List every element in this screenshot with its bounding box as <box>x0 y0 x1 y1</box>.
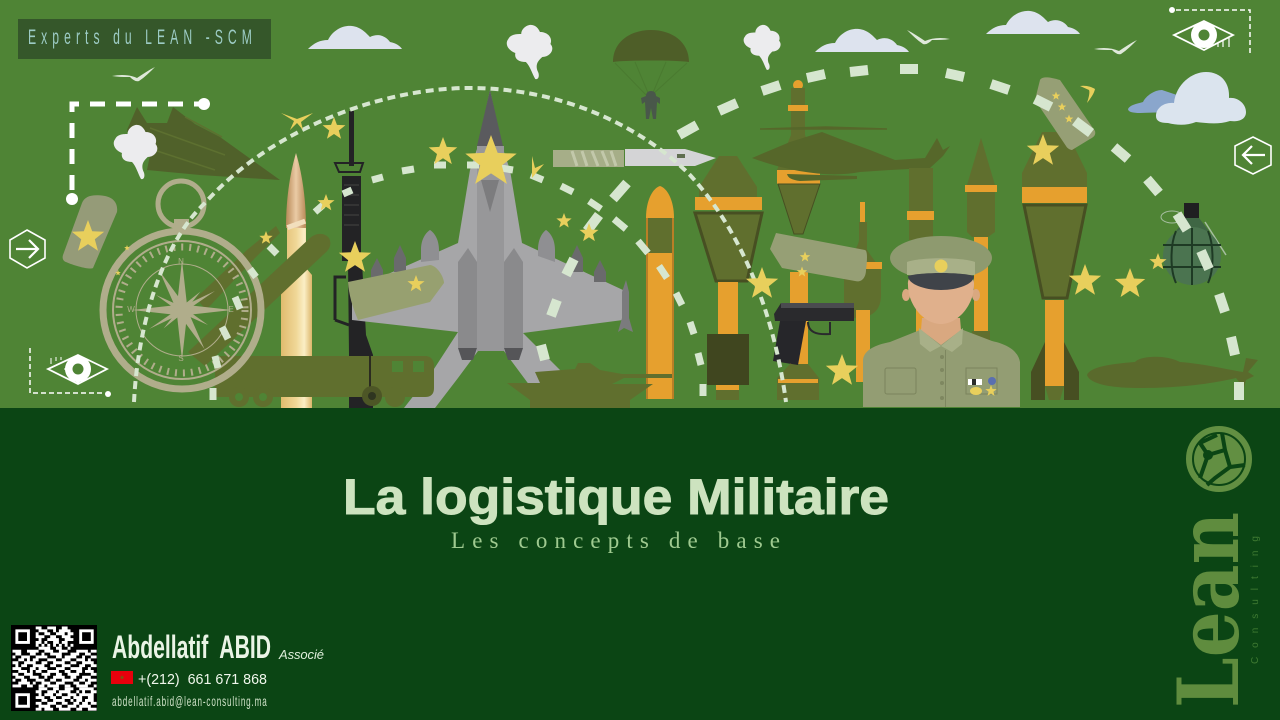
logo wordmark: Lean <box>1159 512 1258 708</box>
subtitle: Les concepts de base <box>451 528 780 553</box>
submarine silhouette <box>1087 357 1258 388</box>
parachutist <box>613 30 689 119</box>
icon: Morocco flag <box>111 671 133 684</box>
knife <box>553 149 716 167</box>
missile 7 large <box>1022 132 1087 400</box>
logo globe <box>1189 429 1249 489</box>
smoke puffs <box>114 25 781 179</box>
missile 6 slim <box>965 138 997 340</box>
green jet silhouette <box>127 107 280 180</box>
missile 3 with helicopter <box>777 80 820 400</box>
thin dashed arc <box>134 88 786 402</box>
compass: E <box>228 305 234 314</box>
shoulder patch: wing <box>348 265 444 320</box>
shoulder patch: top right <box>1035 77 1095 150</box>
wide dashed arc: outer <box>541 69 1239 400</box>
wide dashed arc: inner <box>213 165 703 400</box>
hexagon arrow: left <box>1235 137 1271 174</box>
background: top green band <box>0 0 1280 408</box>
banner: Experts du LEAN -SCM: Experts du LEAN -SCM <box>28 24 252 49</box>
banner: Experts du LEAN -SCM <box>18 19 271 59</box>
hexagon arrow: right <box>10 230 45 268</box>
rifle <box>335 111 373 408</box>
eye icon: bottom left <box>30 348 111 397</box>
fighter jet <box>352 90 633 408</box>
logo: Lean Consulting <box>1159 429 1261 708</box>
missile 4 bottle <box>844 202 882 382</box>
shoulder patch: left <box>63 195 117 269</box>
QR code <box>11 625 97 711</box>
clouds <box>308 11 1080 52</box>
contact name: Abdellatif ABID <box>112 629 271 665</box>
tank silhouette <box>507 363 672 408</box>
helicopter silhouette <box>752 127 950 181</box>
contact phone: +(212) 661 671 868 <box>138 672 267 688</box>
logo tagline: Consulting <box>1250 536 1261 664</box>
compass: W <box>127 305 135 314</box>
compass: S <box>178 354 184 363</box>
contact email: abdellatif.abid@lean-consulting.ma <box>112 695 267 710</box>
grenade <box>1161 203 1226 285</box>
eye icon: top right <box>1169 7 1250 56</box>
cloud group: right blue and white clouds <box>1128 72 1246 125</box>
officer <box>863 236 1020 407</box>
pistol <box>773 303 854 365</box>
title: La logistique Militaire <box>343 469 889 525</box>
contact role: Associé <box>278 647 324 662</box>
military truck <box>215 356 434 407</box>
background: bottom dark green band <box>0 408 1280 720</box>
artillery barrels <box>188 226 330 366</box>
shoulder patch: center right <box>770 233 867 281</box>
compass <box>103 181 261 389</box>
missile 5 column <box>907 168 934 340</box>
top-left dashed corner <box>66 98 210 205</box>
missile 2: mortar <box>695 156 762 400</box>
compass: N <box>178 257 184 266</box>
stars <box>72 86 1167 385</box>
birds <box>112 30 1137 81</box>
missile 1: tall orange <box>646 186 674 399</box>
bullet <box>281 153 312 408</box>
